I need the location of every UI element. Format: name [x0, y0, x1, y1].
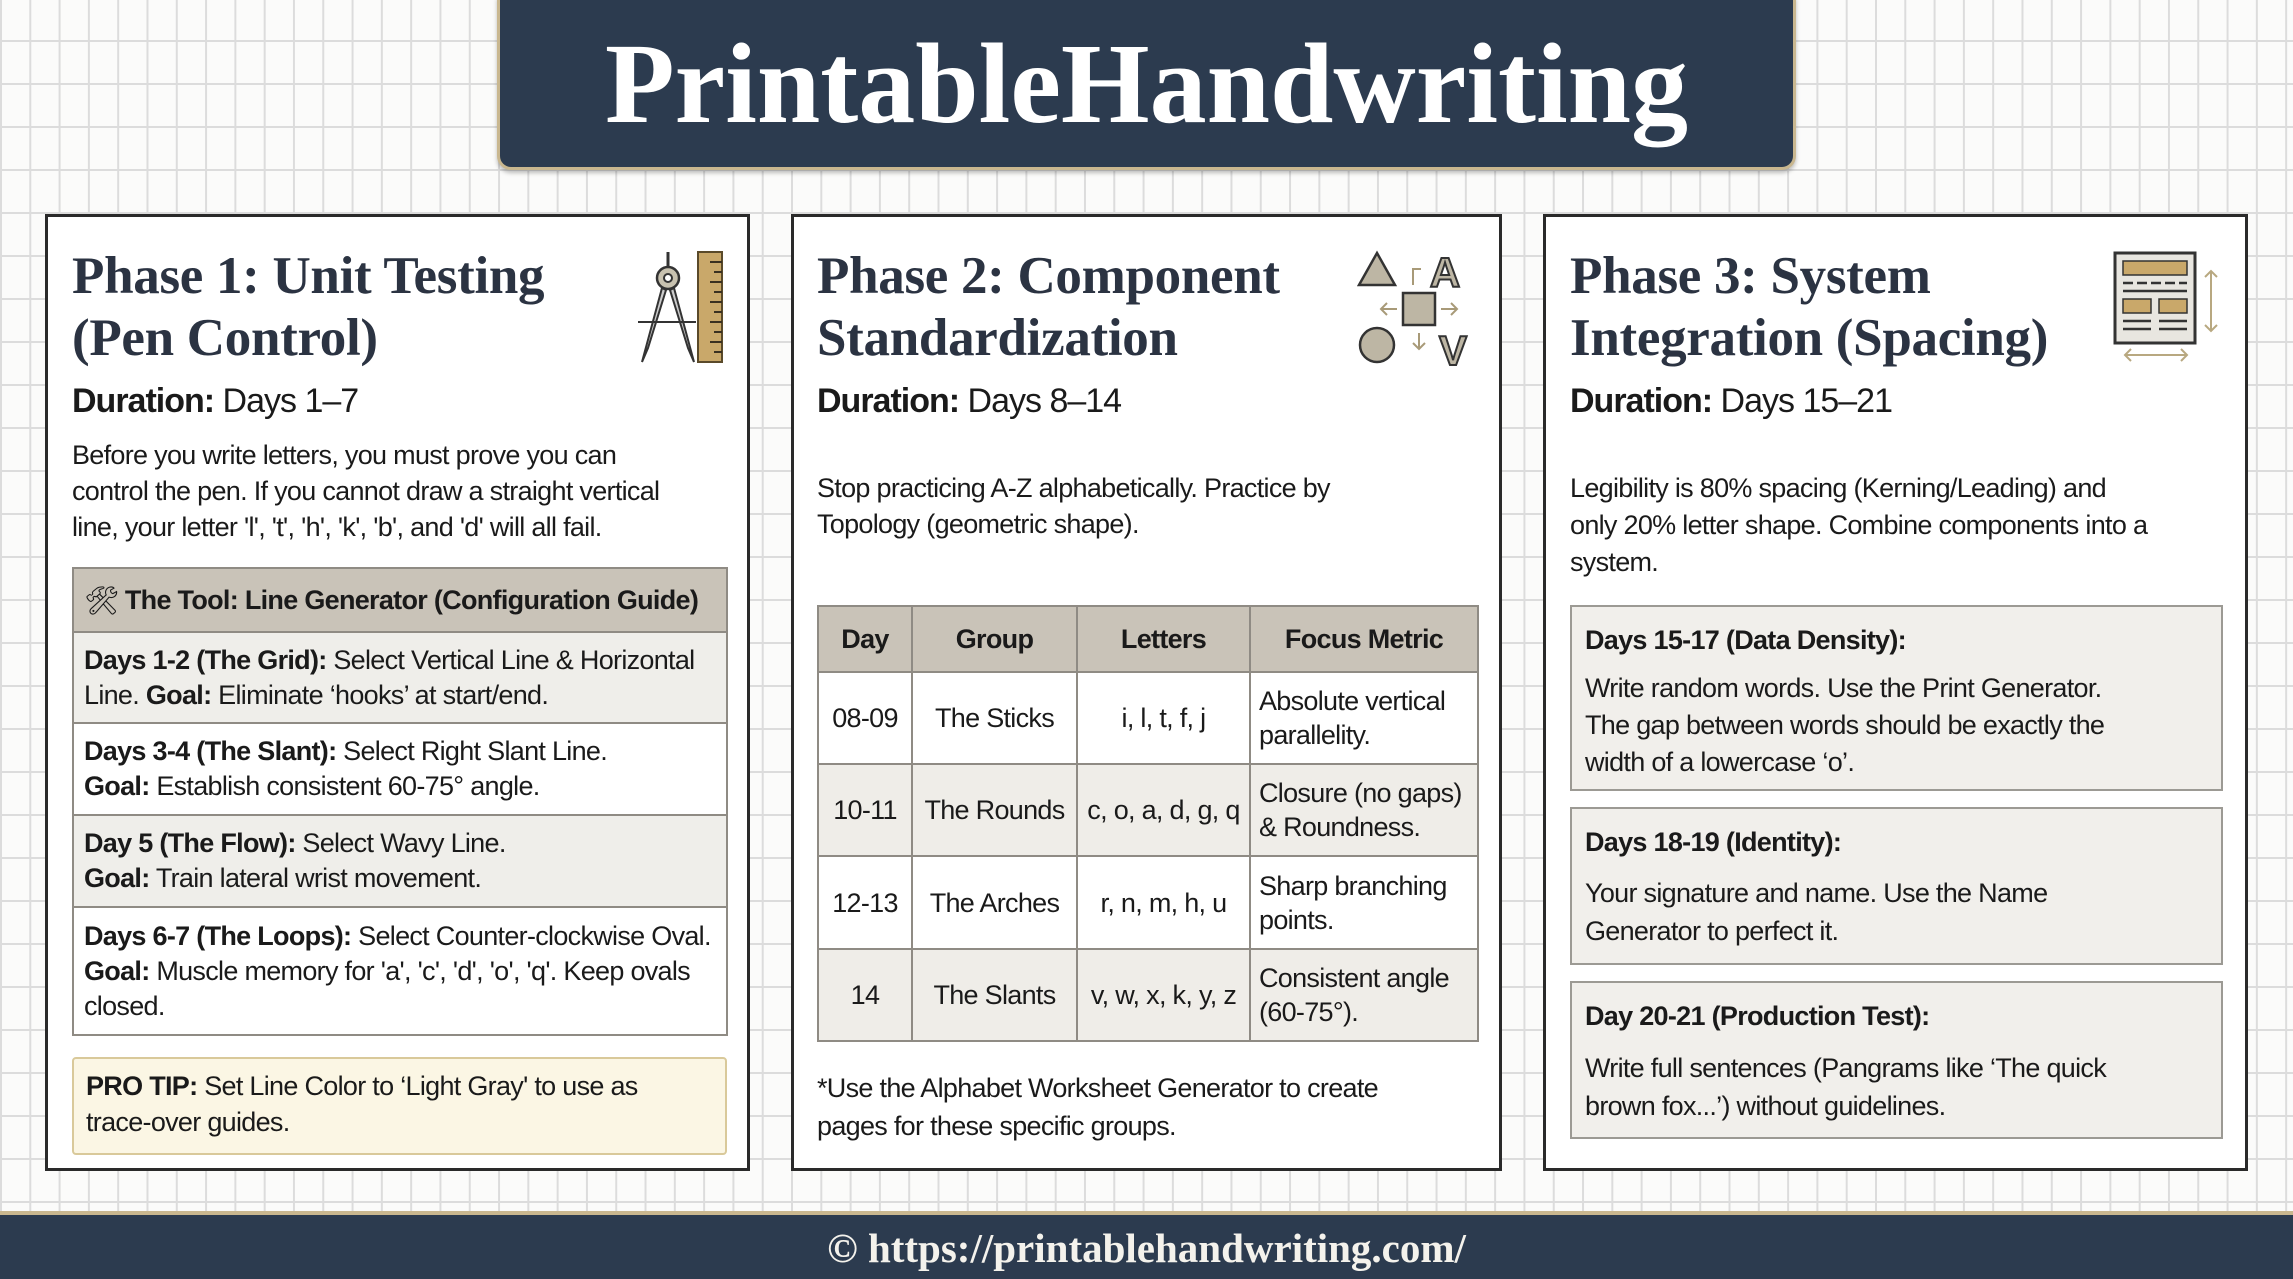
- row days 6-7: [74, 906, 726, 1034]
- box: days 18-19: Your signature and name. Use the Name: [1585, 878, 2047, 908]
- icon: shapes and letters: [1357, 249, 1468, 369]
- duration: Duration: Days 8–14: [817, 382, 1121, 420]
- row days 1-2: [74, 631, 726, 722]
- intro text: control the pen. If you cannot draw a straight vertical: [72, 476, 659, 506]
- row days 6-7: Days 6-7 (The Loops): Select Counter-clockwise Oval.: [84, 920, 711, 950]
- letter group table: v, w, x, k, y, z: [1091, 980, 1236, 1010]
- footer url: © https://printablehandwriting.com/: [827, 1225, 1466, 1271]
- tool guide table: [72, 567, 728, 1036]
- intro text: Legibility is 80% spacing (Kerning/Leading) and: [1570, 473, 2106, 503]
- letter group table: The Rounds: [924, 795, 1065, 825]
- box: days 15-17: width of a lowercase ‘o’.: [1585, 747, 1854, 777]
- letter group table: Focus Metric: [1285, 624, 1443, 654]
- duration: Duration: Days 1–7: [72, 382, 358, 420]
- heading phase 1: Phase 1: Unit Testing: [72, 247, 544, 305]
- panel: phase 2: [791, 214, 1502, 1171]
- intro text: [1570, 473, 2148, 577]
- heading phase 2: Standardization: [817, 309, 1178, 367]
- letter group table: r, n, m, h, u: [1101, 888, 1226, 918]
- letter group table: parallelity.: [1259, 720, 1370, 750]
- letter group table: 08-09: [832, 703, 898, 733]
- intro text: Before you write letters, you must prove you can: [72, 440, 616, 470]
- row days 1-2: Line. Goal: Eliminate ‘hooks’ at start/end.: [84, 680, 548, 710]
- letter group table: c, o, a, d, g, q: [1087, 795, 1240, 825]
- letter group table: & Roundness.: [1259, 812, 1420, 842]
- title text: PrintableHandwriting: [605, 20, 1688, 147]
- letter group table: The Slants: [933, 980, 1056, 1010]
- heading phase 3: [1570, 247, 2048, 367]
- row days 6-7: closed.: [84, 990, 165, 1020]
- row days 3-4: Days 3-4 (The Slant): Select Right Slant Line.: [84, 736, 607, 766]
- box: days 20-21: [1570, 981, 2223, 1139]
- row day 5: [74, 814, 726, 906]
- letter group table: 14: [851, 980, 879, 1010]
- box: days 15-17: Write random words. Use the Print Generator.: [1585, 673, 2101, 703]
- pro tip callout: PRO TIP: Set Line Color to ‘Light Gray' to use as: [86, 1071, 638, 1101]
- pro tip callout: [72, 1057, 727, 1155]
- heading phase 2: Phase 2: Component: [817, 247, 1280, 305]
- box: days 15-17: The gap between words should be exactly the: [1585, 710, 2104, 740]
- letter group table: Day: [841, 624, 889, 654]
- letter group table: The Arches: [930, 888, 1059, 918]
- icon: layout spacing: [2114, 252, 2218, 362]
- intro text: Stop practicing A-Z alphabetically. Practice by: [817, 473, 1330, 503]
- panel: phase 3: [1543, 214, 2248, 1171]
- intro text: only 20% letter shape. Combine components into a: [1570, 510, 2147, 540]
- heading phase 2: [817, 247, 1280, 367]
- letter group table: points.: [1259, 904, 1334, 934]
- footnote: *Use the Alphabet Worksheet Generator to create: [817, 1073, 1378, 1103]
- duration: Duration: Days 15–21: [1570, 382, 1892, 420]
- letter group table: The Sticks: [935, 703, 1054, 733]
- intro text: [817, 473, 1330, 539]
- row days 3-4: [74, 722, 726, 814]
- footer bar: [0, 1211, 2293, 1279]
- letter group table: Consistent angle: [1259, 963, 1449, 993]
- letter group table: (60-75°).: [1259, 997, 1358, 1027]
- intro text: Topology (geometric shape).: [817, 509, 1139, 539]
- footnote: pages for these specific groups.: [817, 1111, 1176, 1141]
- box: days 20-21: brown fox...’) without guidelines.: [1585, 1091, 1945, 1121]
- icon: shapes and letters: A: [1430, 249, 1460, 296]
- intro text: system.: [1570, 547, 1658, 577]
- letter group table: 10-11: [833, 795, 897, 825]
- letter group table: Absolute vertical: [1259, 686, 1445, 716]
- intro text: line, your letter 'l', 't', 'h', 'k', 'b', and 'd' will all fail.: [72, 512, 602, 542]
- row day 5: Goal: Train lateral wrist movement.: [84, 863, 481, 893]
- box: days 18-19: Days 18-19 (Identity):: [1585, 827, 1841, 857]
- box: days 18-19: [1570, 807, 2223, 965]
- letter group table: 12-13: [832, 888, 898, 918]
- letter group table: i, l, t, f, j: [1122, 703, 1205, 733]
- heading phase 1: (Pen Control): [72, 309, 378, 367]
- footnote: [817, 1073, 1378, 1141]
- box: days 20-21: Day 20-21 (Production Test):: [1585, 1001, 1929, 1031]
- box: days 20-21: Write full sentences (Pangrams like ‘The quick: [1585, 1053, 2106, 1083]
- row day 5: Day 5 (The Flow): Select Wavy Line.: [84, 828, 506, 858]
- box: days 18-19: Generator to perfect it.: [1585, 916, 1838, 946]
- title banner: [497, 0, 1796, 170]
- heading phase 3: Integration (Spacing): [1570, 309, 2048, 367]
- letter group table: Sharp branching: [1259, 870, 1447, 900]
- intro text: [72, 440, 659, 542]
- tool header: [74, 569, 726, 631]
- icon: compass and ruler: [638, 251, 723, 363]
- box: days 15-17: [1570, 605, 2223, 791]
- panel: phase 1: [45, 214, 750, 1171]
- letter group table: Closure (no gaps): [1259, 778, 1462, 808]
- letter group table: Letters: [1121, 624, 1206, 654]
- tool header: 🛠: [84, 584, 119, 616]
- tool header: The Tool: Line Generator (Configuration Guide): [125, 584, 698, 614]
- row days 1-2: Days 1-2 (The Grid): Select Vertical Line & Horizontal: [84, 644, 694, 674]
- row days 6-7: Goal: Muscle memory for 'a', 'c', 'd', 'o', 'q'. Keep ovals: [84, 956, 690, 986]
- pro tip callout: trace-over guides.: [86, 1107, 290, 1137]
- row days 3-4: Goal: Establish consistent 60-75° angle.: [84, 771, 540, 801]
- heading phase 3: Phase 3: System: [1570, 247, 1931, 305]
- heading phase 1: [72, 247, 544, 367]
- letter group table: Group: [956, 624, 1033, 654]
- box: days 15-17: Days 15-17 (Data Density):: [1585, 625, 1906, 655]
- letter group table: [817, 605, 1479, 1042]
